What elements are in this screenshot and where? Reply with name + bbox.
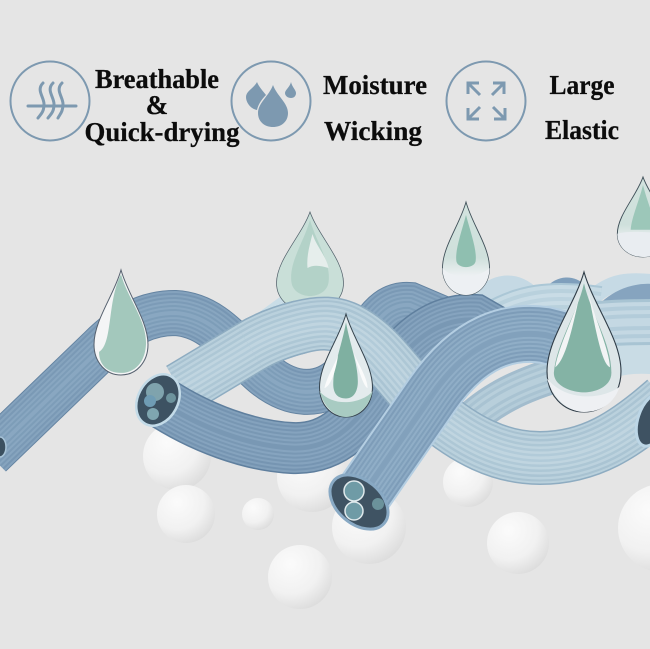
back fibre tubes [0,281,650,455]
tube G: mid fibre under front tube [465,372,565,425]
droplet 2, behind the light fibre [277,212,343,312]
heading: Large Elastic: Elastic [545,115,619,145]
heading: Breathable & Quick-drying [84,64,240,147]
droplet 3 [443,202,489,295]
right pale and light fibres [590,322,650,362]
icon: water drops in circle [232,62,310,140]
droplet 4 [320,314,372,417]
heading: Moisture Wicking: Moisture [323,70,427,100]
droplet 6 [617,177,650,257]
droplet 5 [547,272,621,412]
icon: expand arrows in circle [446,62,526,140]
tube C left: light fibre [180,327,300,389]
tube end: with fibres, left [128,367,188,433]
heading: Breathable & Quick-drying: & [146,90,168,120]
tube end: with fibres, front [320,464,398,540]
front fibre tubes [158,320,650,502]
heading: Breathable & Quick-drying: Quick-drying [84,117,240,147]
droplet 1 [94,270,148,375]
white spheres [143,422,650,609]
icon: breathable waves in circle [10,62,90,140]
back light tubes, upper right [478,281,650,318]
heading: Large Elastic: Large [550,70,615,100]
tube D: front blue fibre [358,334,585,502]
heading: Moisture Wicking: Wicking [324,116,423,146]
tube A: dark fibre from left [0,305,450,455]
tube C right: light fibre crossing over [250,324,650,458]
pale back tube behind crossing [222,306,288,354]
tube end: left edge [0,437,6,457]
tube B: dark front fibre [158,320,510,448]
heading: Large Elastic [545,70,619,145]
tube end: right edge [630,390,650,450]
heading: Moisture Wicking [323,70,427,146]
heading: Breathable & Quick-drying: Breathable [95,64,219,94]
